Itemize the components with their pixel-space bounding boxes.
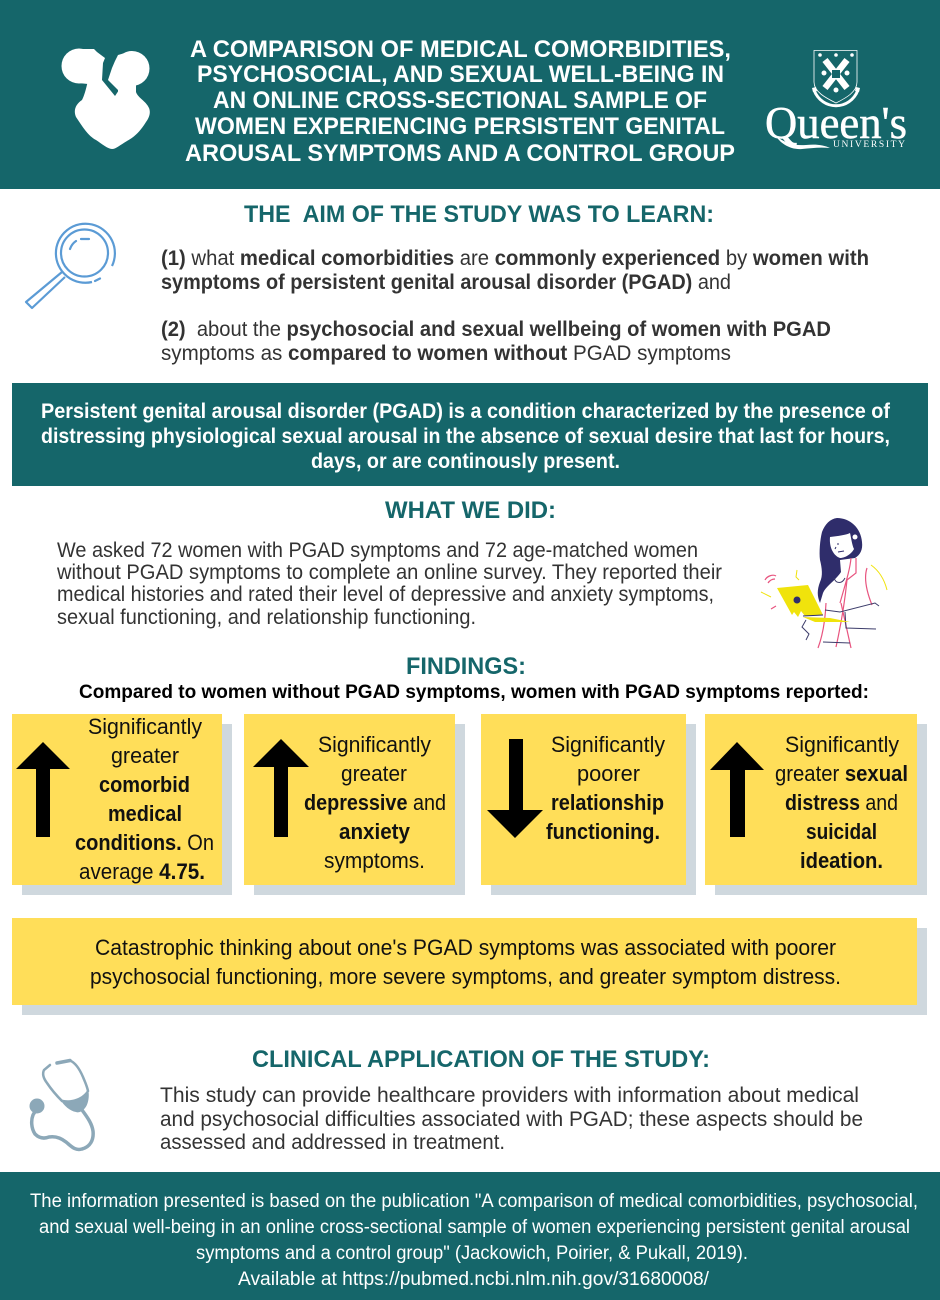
card: comorbid conditions: Significantly	[88, 714, 202, 739]
text: aims: symptoms of persistent genital arousal disorder (PGAD) and	[161, 271, 731, 294]
text: methods: without PGAD symptoms to complete an online survey. They reported their	[56, 561, 722, 584]
card: depressive and anxiety: anxiety	[339, 819, 411, 844]
card: comorbid conditions: greater	[111, 743, 179, 768]
text: aims: (1) what medical comorbidities are commonly experienced by women with	[161, 247, 869, 270]
text: aims: (2) about the psychosocial and sexual wellbeing of women with PGAD	[161, 318, 831, 341]
text: methods: sexual functioning, and relationship functioning.	[57, 606, 476, 629]
card: comorbid conditions: medical	[108, 801, 182, 826]
card: sexual distress and suicidal ideation: greater sexual	[775, 761, 908, 786]
card: sexual distress and suicidal ideation: suicidal	[806, 819, 877, 844]
findings subheading: Compared to women without PGAD symptoms, women with PGAD symptoms reported:	[79, 681, 869, 703]
title: AROUSAL SYMPTOMS AND A CONTROL GROUP	[185, 140, 735, 167]
card: depressive and anxiety: Significantly	[318, 732, 431, 757]
icon: magnifying glass	[26, 224, 115, 308]
icon: embracing silhouette	[62, 48, 150, 149]
text: clinical application: This study can provide healthcare providers with information about medical	[160, 1084, 859, 1107]
callout: catastrophic thinking: Catastrophic thinking about one's PGAD symptoms was associated with poorer	[95, 935, 836, 960]
card: depressive and anxiety: greater	[341, 761, 407, 786]
card: sexual distress and suicidal ideation: ideation.	[800, 848, 883, 873]
card: comorbid conditions: average 4.75.	[79, 859, 205, 884]
heading: clinical application: CLINICAL APPLICATION OF THE STUDY:	[252, 1046, 710, 1073]
text: clinical application: assessed and addressed in treatment.	[160, 1131, 505, 1154]
card: depressive and anxiety: symptoms.	[324, 848, 425, 873]
text: methods: We asked 72 women with PGAD symptoms and 72 age-matched women	[57, 539, 698, 562]
title: A COMPARISON OF MEDICAL COMORBIDITIES,	[190, 36, 731, 63]
callout: catastrophic thinking: psychosocial functioning, more severe symptoms, and greater symptom distress.	[90, 964, 841, 989]
callout: catastrophic thinking	[12, 918, 927, 1015]
card: comorbid conditions: conditions. On	[75, 830, 214, 855]
text: methods: medical histories and rated their level of depressive and anxiety symptoms,	[57, 583, 714, 606]
title: AN ONLINE CROSS-SECTIONAL SAMPLE OF	[213, 87, 707, 114]
header banner	[0, 0, 940, 189]
arrow down	[487, 739, 543, 838]
card: sexual distress and suicidal ideation: Significantly	[785, 732, 899, 757]
card: comorbid conditions: comorbid	[99, 772, 190, 797]
definition banner: Persistent genital arousal disorder (PGAD) is a condition characterized by the presence of	[41, 400, 891, 423]
card: relationship functioning: Significantly	[551, 732, 665, 757]
definition banner: distressing physiological sexual arousal in the absence of sexual desire that last for hours,	[41, 425, 890, 448]
text: aims	[161, 247, 869, 365]
card: relationship functioning: functioning.	[546, 819, 660, 844]
heading: findings: FINDINGS:	[406, 653, 526, 680]
footer: citation: The information presented is based on the publication "A comparison of medical comorbidities, psychosocial,	[30, 1191, 918, 1212]
text: clinical application	[160, 1084, 863, 1154]
footer: citation: Available at https://pubmed.ncbi.nlm.nih.gov/31680008/	[238, 1269, 710, 1290]
card: sexual distress and suicidal ideation	[705, 714, 927, 895]
text: methods	[56, 539, 722, 629]
logo: Queen's University: UNIVERSITY	[833, 140, 905, 150]
card: relationship functioning	[481, 714, 696, 895]
card: relationship functioning: poorer	[577, 761, 640, 786]
definition banner	[12, 383, 928, 486]
title: WOMEN EXPERIENCING PERSISTENT GENITAL	[195, 113, 725, 140]
title	[185, 36, 735, 167]
heading: what we did: WHAT WE DID:	[385, 497, 556, 524]
card: comorbid conditions	[12, 714, 232, 895]
arrow up	[710, 742, 764, 837]
text: clinical application: and psychosocial difficulties associated with PGAD; these aspects should be	[160, 1108, 863, 1131]
heading: aim of the study: THE AIM OF THE STUDY WAS TO LEARN:	[244, 201, 714, 228]
card: relationship functioning: relationship	[551, 790, 664, 815]
icon: woman with laptop	[761, 518, 887, 648]
card: depressive and anxiety: depressive and	[304, 790, 446, 815]
card: depressive and anxiety	[244, 714, 465, 895]
icon: stethoscope	[30, 1060, 93, 1149]
logo: Queen's University	[765, 50, 907, 150]
title: PSYCHOSOCIAL, AND SEXUAL WELL-BEING IN	[197, 61, 724, 88]
footer: citation: symptoms and a control group" (Jackowich, Poirier, & Pukall, 2019).	[196, 1243, 748, 1264]
footer: citation	[0, 1172, 940, 1300]
definition banner: days, or are continously present.	[311, 450, 620, 473]
card: sexual distress and suicidal ideation: distress and	[785, 790, 898, 815]
footer: citation: and sexual well-being in an online cross-sectional sample of women experiencing persistent genital arousal	[39, 1217, 910, 1238]
arrow up	[16, 742, 70, 837]
logo: Queen's University: Queen's	[765, 98, 907, 148]
arrow up	[253, 739, 309, 837]
text: aims: symptoms as compared to women without PGAD symptoms	[161, 342, 731, 365]
